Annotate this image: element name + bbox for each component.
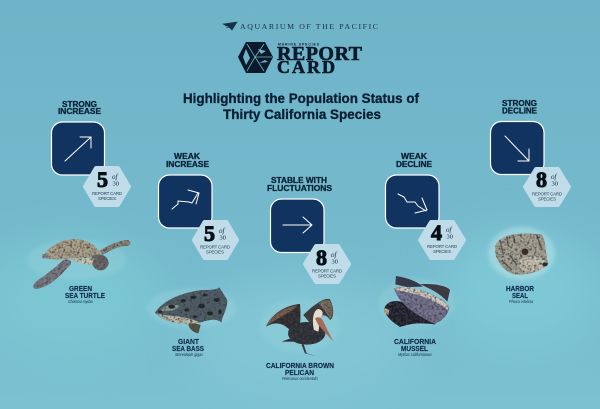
- caption: [266, 363, 334, 381]
- trend card: [386, 175, 439, 228]
- count badge: [525, 167, 569, 205]
- icon: arrow down right: [505, 136, 529, 161]
- count badge: 8: [536, 167, 547, 192]
- title: Highlighting the Population Status of: [183, 91, 419, 106]
- heading: STRONG: [62, 100, 97, 109]
- caption: [506, 286, 534, 304]
- panel: harbor seal: [488, 227, 555, 304]
- count badge: 5: [204, 221, 215, 246]
- count badge: REPORT CARD: [312, 268, 342, 274]
- icon: arrow up right: [65, 137, 91, 161]
- count badge: 30: [446, 234, 453, 240]
- title: [183, 91, 419, 122]
- count badge: REPORT CARD: [427, 244, 457, 249]
- caption: GREEN: [69, 286, 92, 293]
- count badge: REPORT CARD: [92, 191, 122, 196]
- logo: Marine Species Report Card: MARINE SPECIES: [278, 42, 320, 46]
- heading: WEAK: [174, 152, 200, 161]
- count badge: SPECIES: [318, 274, 336, 278]
- count badge: SPECIES: [538, 196, 556, 202]
- caption: Pelecanus occidentalis: [282, 376, 319, 381]
- logo: Marine Species Report Card: CARD: [277, 57, 335, 77]
- count badge: 30: [112, 180, 119, 188]
- count badge: 30: [220, 234, 226, 242]
- panel: strong decline: [490, 99, 569, 205]
- trend card: [158, 175, 212, 228]
- count badge: [420, 220, 464, 258]
- caption: SEAL: [512, 293, 529, 300]
- caption: Chelonia mydas: [68, 299, 94, 304]
- count badge: 5: [97, 167, 108, 192]
- header logo: Aquarium of the Pacific: AQUARIUM OF THE PACIFIC: [240, 22, 378, 31]
- count badge: 30: [552, 180, 558, 188]
- caption: CALIFORNIA BROWN: [266, 363, 334, 370]
- caption: GIANT: [178, 339, 200, 346]
- heading: [267, 176, 333, 193]
- panel: california mussel: [378, 276, 455, 357]
- caption: [65, 286, 105, 304]
- caption: MUSSEL: [401, 346, 429, 353]
- count badge: SPECIES: [98, 196, 116, 201]
- panel: weak increase: [158, 152, 237, 258]
- illustration: fish: [147, 287, 237, 333]
- heading: DECLINE: [396, 160, 433, 169]
- caption: [394, 339, 436, 357]
- count badge: of: [551, 173, 558, 181]
- caption: [172, 339, 204, 357]
- heading: [502, 99, 538, 116]
- count badge: 4: [431, 220, 442, 245]
- panel: california brown pelican: [260, 298, 340, 381]
- panel: stable with fluctuations: [267, 176, 349, 282]
- count badge: of: [331, 251, 338, 259]
- logo: Marine Species Report Card: [238, 42, 363, 77]
- count badge: REPORT CARD: [532, 192, 562, 196]
- count badge: SPECIES: [433, 249, 451, 254]
- trend card: [52, 122, 104, 175]
- heading: [166, 152, 210, 169]
- heading: STRONG: [502, 99, 537, 108]
- illustration: pelican: [260, 298, 340, 356]
- heading: FLUCTUATIONS: [267, 184, 333, 193]
- count badge: [85, 167, 129, 205]
- count badge: of: [219, 227, 226, 235]
- heading: STABLE WITH: [271, 176, 327, 185]
- caption: Phoca vitulina: [509, 299, 534, 304]
- panel: weak decline: [386, 152, 464, 258]
- heading: INCREASE: [166, 160, 210, 169]
- trend card: [270, 199, 324, 252]
- count badge: of: [446, 226, 452, 234]
- caption: Mytilus californianus: [398, 352, 433, 357]
- panel: strong increase: [52, 100, 129, 205]
- icon: hexagon emblem: [238, 42, 273, 73]
- caption: HARBOR: [506, 286, 534, 293]
- title: Thirty California Species: [223, 107, 381, 122]
- illustration: mussel: [378, 276, 455, 328]
- caption: SEA BASS: [172, 346, 204, 353]
- caption: SEA TURTLE: [65, 293, 105, 300]
- panel: giant sea bass: [147, 287, 237, 357]
- count badge: 30: [332, 258, 338, 266]
- heading: DECLINE: [502, 106, 538, 116]
- caption: PELICAN: [285, 370, 314, 377]
- caption: Stereolepis gigas: [175, 352, 204, 357]
- trend card: [490, 122, 544, 174]
- illustration: turtle: [27, 239, 130, 289]
- count badge: SPECIES: [206, 250, 224, 254]
- heading: [58, 100, 102, 116]
- logo: Marine Species Report Card: REPORT: [277, 43, 363, 65]
- count badge: REPORT CARD: [200, 244, 230, 250]
- heading: INCREASE: [58, 107, 102, 116]
- heading: WEAK: [401, 152, 427, 161]
- icon: jagged arrow up: [172, 190, 199, 209]
- count badge: of: [112, 173, 118, 181]
- illustration: seal: [488, 227, 555, 280]
- heading: [396, 152, 433, 169]
- count badge: [194, 221, 237, 258]
- caption: CALIFORNIA: [394, 339, 436, 346]
- panel: green sea turtle: [27, 239, 130, 304]
- count badge: [305, 245, 349, 282]
- icon: jagged arrow down: [398, 194, 427, 213]
- count badge: 8: [316, 245, 327, 270]
- icon: arrow right: [283, 217, 312, 233]
